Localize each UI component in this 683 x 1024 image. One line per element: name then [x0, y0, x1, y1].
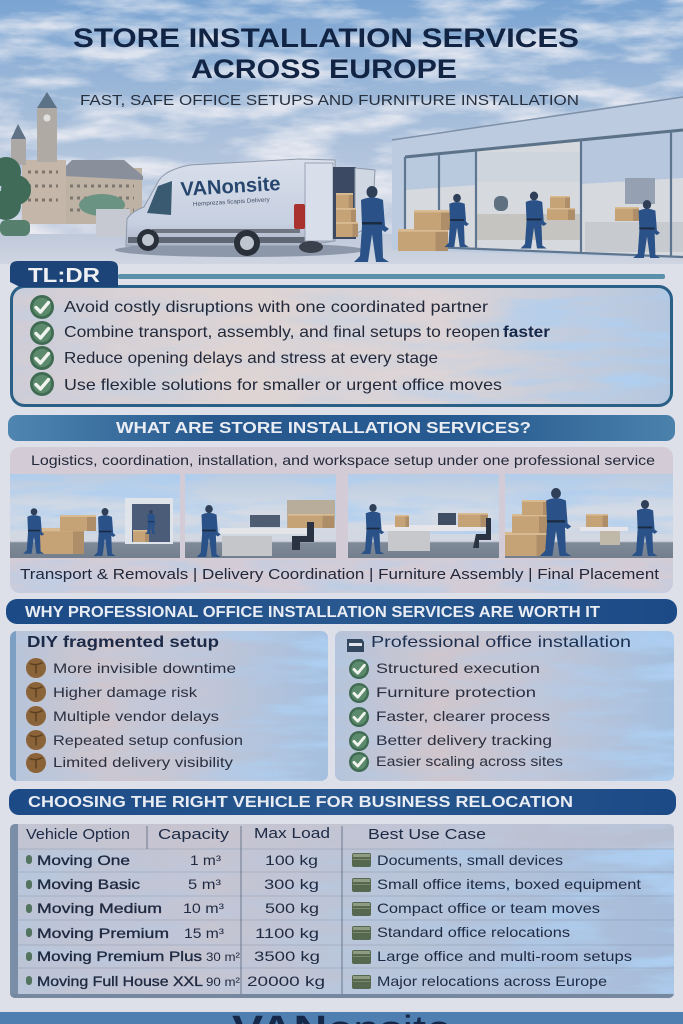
section header: why professional — [6, 599, 677, 624]
van logo: VANonsite — [180, 173, 281, 201]
panel: services — [10, 447, 673, 593]
professional list — [349, 659, 563, 772]
professional heading: Professional office installation — [371, 634, 631, 651]
DIY heading: DIY fragmented setup — [27, 634, 219, 651]
footer band with logo — [0, 1012, 683, 1024]
section header: why professional: WHY PROFESSIONAL OFFICE INSTALLATION SERVICES ARE WORTH IT — [25, 604, 601, 621]
row: Moving Medium: 10 m³ — [183, 900, 224, 916]
row: Moving Medium: Compact office or team moves — [377, 900, 600, 916]
DIY list — [26, 658, 243, 773]
row: Moving Basic: 5 m³ — [188, 876, 221, 892]
row: Moving Basic: 300 kg — [264, 876, 319, 892]
row: Moving Premium Plus — [26, 948, 632, 964]
row: Moving Basic: Moving Basic — [37, 876, 140, 892]
row: Moving Premium Plus: 3500 kg — [254, 948, 320, 964]
row: Moving One — [26, 852, 563, 868]
list of benefits: Combine transport, assembly, and final setups to reopen — [64, 324, 500, 341]
DIY list: Multiple vendor delays — [53, 708, 219, 724]
professional list: Easier scaling across sites — [376, 753, 563, 769]
row: Moving Premium: 1100 kg — [255, 925, 319, 941]
row: Moving Premium Plus: 30 m² — [206, 950, 240, 964]
row: Moving Medium: 500 kg — [265, 900, 319, 916]
row: Moving Premium Plus: Moving Premium Plus — [37, 948, 202, 964]
table header — [26, 826, 486, 843]
heading tab: TL:DR — [28, 265, 101, 287]
row: Moving One: 100 kg — [265, 852, 318, 868]
panel: DIY fragmented setup — [10, 631, 328, 781]
row: Moving Full House XXL: Moving Full House XXL — [37, 973, 203, 989]
image: furniture assembly — [348, 474, 499, 558]
title — [73, 23, 579, 84]
row: Moving Medium — [26, 900, 600, 916]
table header: Capacity — [158, 827, 230, 843]
professional list: Better delivery tracking — [376, 732, 552, 748]
image: final placement — [505, 474, 673, 558]
subtitle: FAST, SAFE OFFICE SETUPS AND FURNITURE INSTALLATION — [80, 92, 579, 109]
van tagline: Hemprezas ficapis Delivery — [193, 197, 270, 208]
table header: Max Load — [254, 826, 330, 842]
row: Moving Basic: Small office items, boxed equipment — [377, 876, 641, 892]
heading tab — [10, 261, 118, 287]
row: Moving Basic — [26, 876, 641, 892]
row: Moving One: Moving One — [37, 852, 130, 868]
row: Moving Premium — [26, 924, 570, 941]
professional list: Furniture protection — [376, 684, 536, 700]
professional list: Structured execution — [376, 660, 540, 676]
glass office building — [392, 97, 683, 258]
row: Moving Full House XXL: 90 m² — [206, 975, 240, 989]
panel: TL;DR — [10, 261, 673, 407]
row: Moving Full House XXL: Major relocations across Europe — [377, 973, 607, 989]
row: Moving Full House XXL — [26, 973, 607, 989]
list of benefits: Avoid costly disruptions with one coordinated partner — [64, 299, 489, 316]
row: Moving Medium: Moving Medium — [37, 900, 162, 916]
title: STORE INSTALLATION SERVICES — [73, 23, 579, 53]
historic city buildings — [11, 92, 143, 224]
trees — [0, 157, 125, 236]
hero illustration: city, van and glass office — [0, 92, 683, 264]
table header: Best Use Case — [368, 827, 486, 843]
row: Moving Full House XXL: 20000 kg — [247, 973, 325, 989]
title: ACROSS EUROPE — [191, 54, 457, 84]
panel: professional office installation — [335, 631, 674, 781]
row: Moving Premium: Standard office relocations — [377, 924, 570, 940]
DIY list: Higher damage risk — [53, 684, 198, 700]
list of benefits: Use flexible solutions for smaller or urgent office moves — [64, 377, 502, 394]
list of benefits: faster — [503, 324, 550, 341]
section header: choosing the right vehicle — [9, 789, 676, 815]
vehicle comparison table — [10, 824, 674, 998]
ground — [0, 234, 683, 264]
section header: what are store installation services: WHAT ARE STORE INSTALLATION SERVICES? — [116, 420, 531, 437]
DIY list: More invisible downtime — [53, 660, 236, 676]
professional list: Faster, clearer process — [376, 708, 550, 724]
row: Moving Premium: Moving Premium — [37, 925, 169, 941]
image: delivery coordination — [185, 474, 336, 558]
row: Moving Premium Plus: Large office and multi-room setups — [377, 948, 632, 964]
row: Moving One: 1 m³ — [190, 852, 221, 868]
row: Moving Premium: 15 m³ — [184, 925, 224, 941]
image: transport and removals — [10, 474, 180, 558]
DIY list: Repeated setup confusion — [53, 732, 243, 748]
list of benefits: Reduce opening delays and stress at every stage — [64, 350, 438, 367]
row: Moving One: Documents, small devices — [377, 852, 563, 868]
services description: Logistics, coordination, installation, and workspace setup under one professional service — [31, 452, 655, 468]
table header: Vehicle Option — [26, 827, 130, 843]
section header: what are store installation services — [8, 415, 675, 441]
DIY list: Limited delivery visibility — [53, 754, 233, 770]
delivery van — [126, 159, 389, 262]
section header: choosing the right vehicle: CHOOSING THE RIGHT VEHICLE FOR BUSINESS RELOCATION — [28, 794, 573, 811]
list of benefits — [30, 295, 550, 396]
service labels: Transport & Removals | Delivery Coordination | Furniture Assembly | Final Placement — [20, 567, 659, 583]
